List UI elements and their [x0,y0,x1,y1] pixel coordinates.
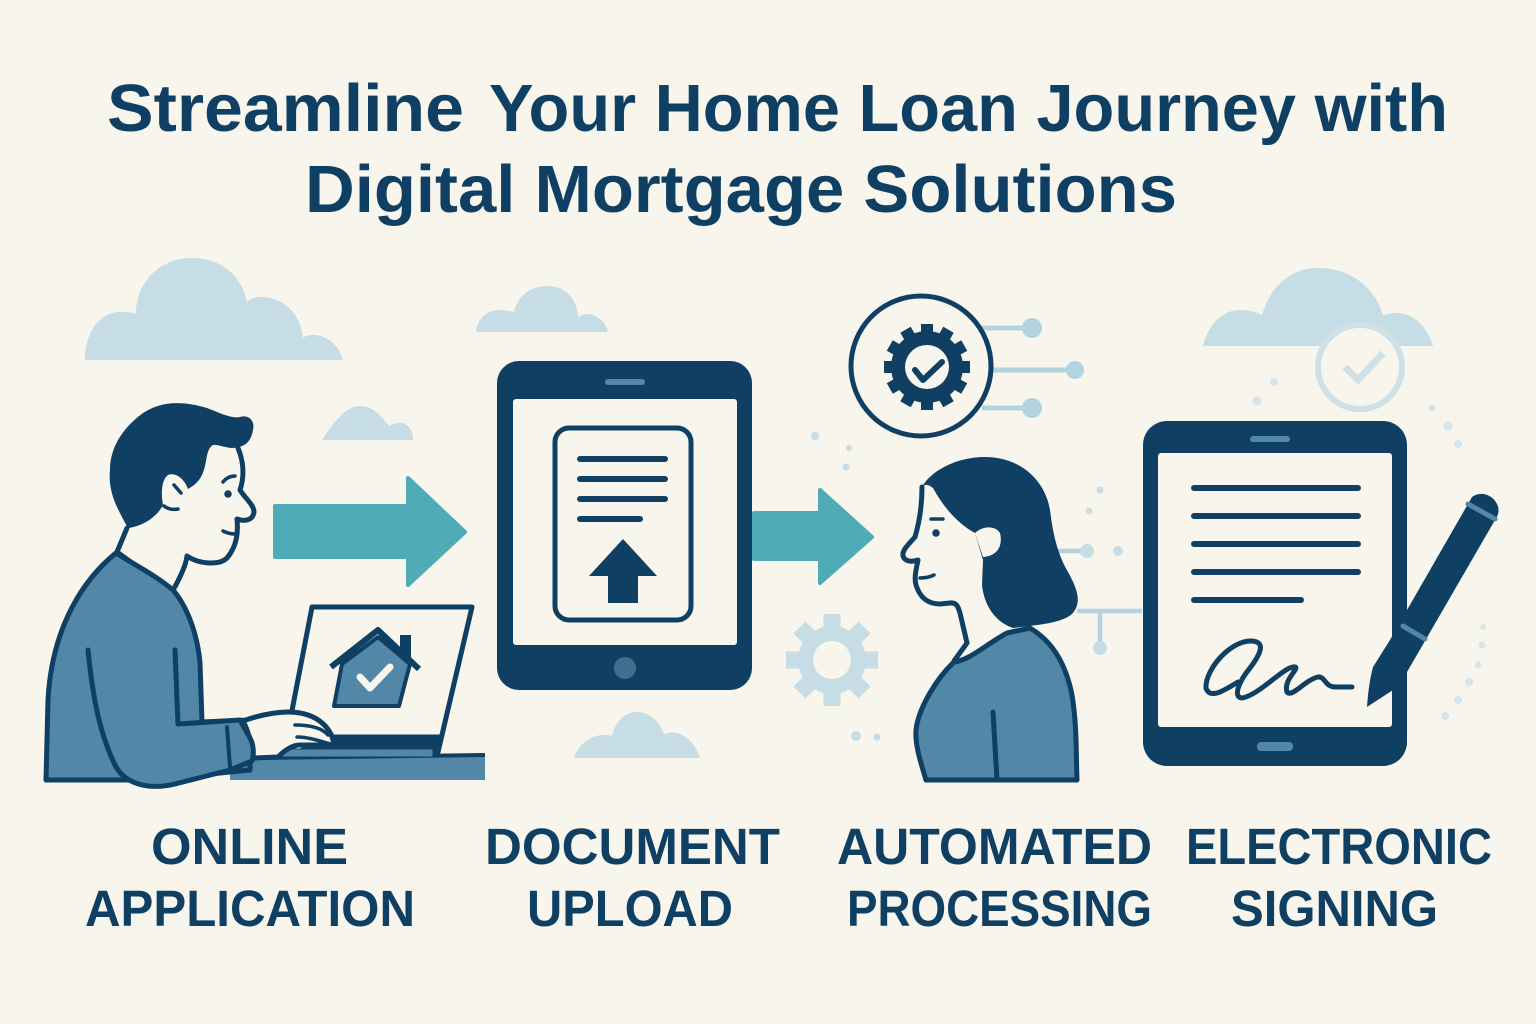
torso [916,628,1077,780]
face [117,448,254,592]
icon: upload arrow [589,539,657,603]
title: Your Home Loan Journey with [489,71,1448,146]
icon: light gear [786,614,878,706]
label: automated processing: AUTOMATED [837,818,1152,875]
icon: pen [1367,494,1498,707]
title [107,71,1448,227]
hand [243,712,334,758]
tablet: electronic signing [1143,421,1407,766]
arrow: first [275,478,465,585]
sleeve [88,650,253,786]
tablet: document upload [497,361,752,690]
ear [975,527,1001,557]
hair [110,403,253,528]
eye and mouth [223,476,235,534]
label: document upload: DOCUMENT [485,818,780,875]
label: online application: ONLINE [151,818,348,875]
ear [162,474,188,509]
laptop [275,607,472,757]
torso [46,553,250,780]
label: document upload [485,818,780,937]
cloud: top middle [476,286,608,332]
signature [1206,641,1352,698]
title: Digital Mortgage Solutions [305,152,1177,227]
icon: house with check [331,630,419,706]
label: automated processing: PROCESSING [847,880,1152,937]
label: automated processing [837,818,1152,937]
person: processor [903,457,1078,780]
icon: faded check badge [1318,325,1402,409]
document [555,428,691,620]
cloud: top left [85,258,343,360]
label: electronic signing [1186,818,1492,937]
title: Streamline [107,71,464,146]
label: online application [85,818,415,937]
cloud: small left [322,406,413,440]
icon: gear with check [851,296,991,436]
hair [922,457,1078,628]
eye and mouth [920,519,943,578]
cloud: bottom middle [574,712,700,758]
cloud: top right [1203,268,1433,346]
label: electronic signing: ELECTRONIC [1186,818,1492,875]
face [903,487,967,661]
person: online applicant [46,403,334,786]
arrow: second [754,490,872,583]
label: online application: APPLICATION [85,880,415,937]
label: electronic signing: SIGNING [1231,880,1438,937]
desk [230,755,485,780]
connector dots [811,318,1486,741]
label: document upload: UPLOAD [527,880,733,937]
